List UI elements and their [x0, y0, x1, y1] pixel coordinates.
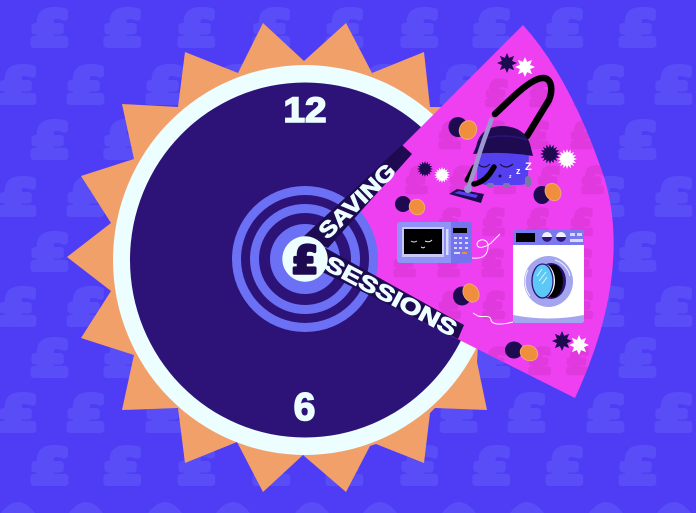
wedge pound pattern: £££££ [394, 244, 592, 283]
vacuum snore: z [516, 166, 521, 176]
vacuum hose [495, 78, 551, 136]
vacuum mouth [498, 174, 502, 178]
microwave handle [446, 229, 448, 255]
sparks right of vacuum [540, 144, 577, 169]
background pound pattern: ££££££££££ [0, 59, 693, 114]
vacuum snore: Z [525, 161, 532, 173]
number 6: 6 [294, 386, 315, 429]
microwave buttons [454, 237, 468, 254]
label band: saving [302, 145, 412, 248]
clock rim [113, 65, 497, 455]
sparks bottom [552, 331, 589, 355]
clock face [130, 82, 480, 438]
coin [534, 180, 564, 204]
vacuum trunk [474, 167, 494, 184]
label band: sessions: SESSIONS [321, 251, 461, 341]
number 12: 12 [284, 91, 326, 130]
centre pound badge: £ [292, 239, 318, 282]
washing machine cord [473, 313, 513, 324]
microwave door [402, 227, 444, 257]
coin [448, 117, 480, 142]
washer door [524, 256, 573, 307]
vacuum eyes [478, 164, 513, 167]
vacuum body [477, 150, 529, 185]
clock sun spikes [67, 23, 500, 492]
vacuum rear trunk [467, 167, 474, 180]
background pound pattern: ££££££££££ [0, 281, 693, 336]
microwave display [453, 228, 467, 233]
background pound pattern: £££££££££ [31, 114, 657, 169]
sparks top [497, 53, 535, 77]
wedge pound pattern: £££ [486, 74, 596, 113]
background pound pattern: £££££££££ [31, 332, 657, 387]
background pound pattern: ££££££££££ [0, 171, 693, 226]
vacuum wheels [487, 176, 531, 188]
washer buttons [570, 233, 583, 242]
wedge pound pattern [394, 74, 604, 381]
background pound pattern: £££££££££ [31, 226, 657, 281]
wedge pound pattern: £££ [485, 342, 589, 381]
icon: sleeping vacuum cleaner [449, 78, 551, 203]
sparks left of vacuum [417, 161, 450, 183]
label band: saving: SAVING [313, 158, 401, 244]
vacuum snore: z [509, 174, 512, 180]
microwave face [411, 240, 432, 248]
wedge pound pattern: ££££ [439, 116, 593, 155]
vacuum lid [473, 126, 533, 156]
panel: magenta saving wedge [360, 25, 614, 398]
washer display [516, 233, 535, 242]
wedge pound pattern: £££££ [406, 161, 604, 200]
microwave cord [472, 234, 500, 258]
wedge pound pattern: ££££ [439, 203, 593, 242]
coin [505, 342, 540, 364]
concentric target rings [232, 186, 378, 332]
coin [395, 196, 428, 218]
washer dials [542, 232, 566, 242]
coin [453, 281, 482, 306]
label band: sessions [310, 246, 464, 341]
wedge pound pattern: ££££ [439, 286, 593, 325]
vacuum snore [509, 161, 532, 180]
icon: sleeping washing machine [513, 230, 584, 323]
background pound pattern: ££££££££££ [0, 387, 693, 442]
icon: sleeping microwave [397, 222, 472, 263]
vacuum wand [468, 118, 492, 189]
background pound pattern: £££££££££ [31, 2, 657, 57]
background pound pattern: £££££££££ [31, 440, 657, 495]
vacuum nozzle [449, 189, 484, 203]
centre pound badge [282, 236, 328, 282]
